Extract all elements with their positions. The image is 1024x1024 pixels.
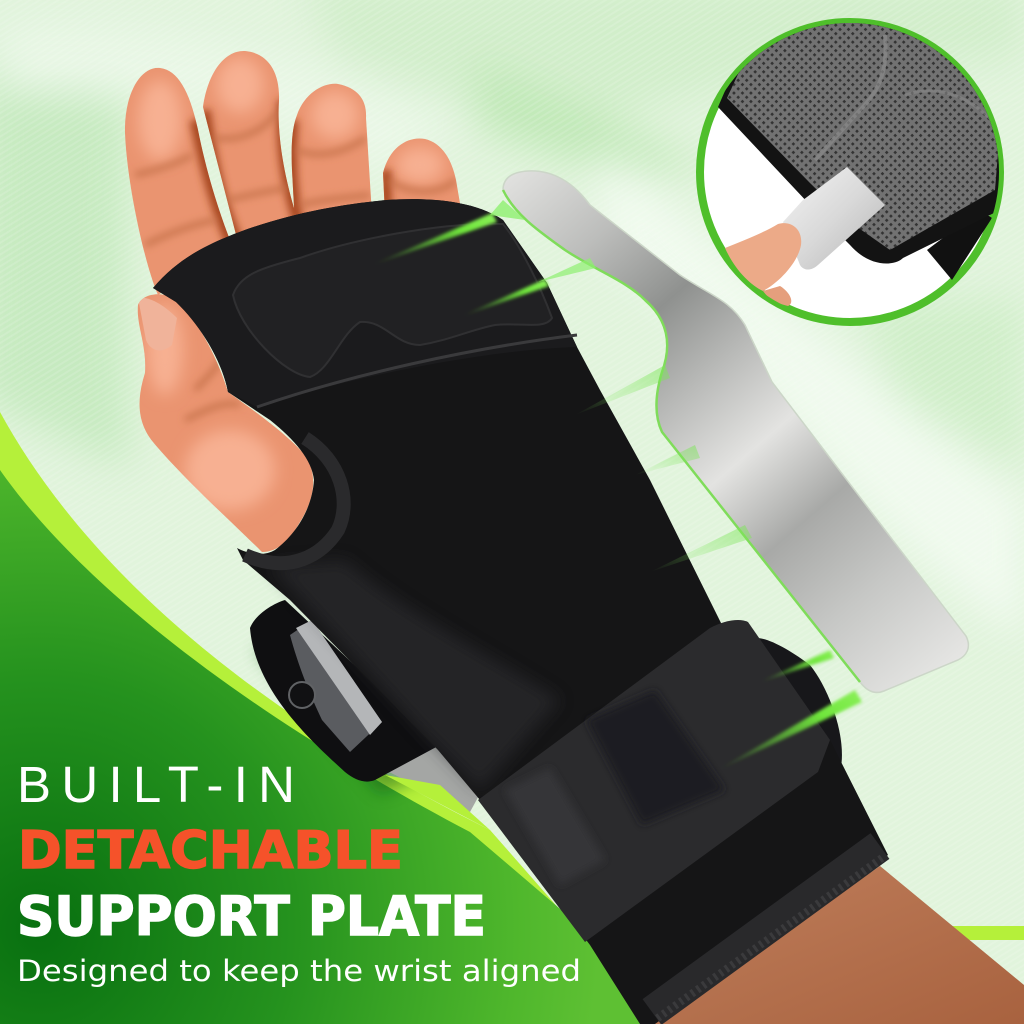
support plate: [503, 171, 968, 692]
line: detachable: DETACHABLE: [18, 821, 403, 881]
plate green edge glow: [503, 190, 860, 682]
strap pads: [586, 690, 725, 825]
mesh fold: [815, 35, 886, 160]
thumb nail: [138, 298, 177, 350]
lime wedge: [385, 775, 490, 830]
lower cuff band: [652, 846, 880, 1012]
thumb hole edging: [245, 438, 344, 563]
hand strap seam: [257, 335, 577, 407]
line: built-in: BUILT-IN: [17, 756, 295, 813]
detachable pod: [250, 600, 842, 830]
padding black edge: [718, 10, 1010, 264]
hand and fingers: [124, 51, 460, 552]
line: support plate: SUPPORT PLATE: [17, 885, 486, 948]
hook and loop pad: [233, 224, 552, 377]
thumb holding plate: [725, 223, 801, 291]
rear pod: [750, 638, 842, 775]
pod blade: [385, 745, 482, 812]
wrist strap: [478, 620, 830, 942]
knuckle creases: [135, 112, 456, 420]
shadows between fingers: [195, 100, 386, 245]
forearm: [650, 866, 1024, 1024]
line: tagline: Designed to keep the wrist aligned: [17, 954, 581, 988]
faint beams and guides: [490, 200, 525, 220]
grey mesh padding: [727, 23, 998, 250]
brace body: [153, 199, 888, 1024]
fingertip highlights: [138, 57, 444, 510]
pod body: [250, 600, 440, 782]
green corner panel: [0, 412, 1024, 1024]
textured lower sleeve: [270, 560, 560, 790]
inset detail circle: [700, 5, 1010, 322]
wrist brace: [153, 199, 888, 1024]
metal plate being inserted: [783, 167, 885, 270]
pod button: [289, 682, 315, 708]
pod silver face: [290, 620, 382, 752]
hand strap: [153, 199, 577, 407]
green light beams: [372, 200, 862, 770]
pod shadow: [255, 640, 440, 795]
black rear tab: [927, 210, 992, 280]
headline: [17, 756, 581, 988]
bright beams: [372, 213, 497, 265]
lower finger: [763, 286, 791, 306]
